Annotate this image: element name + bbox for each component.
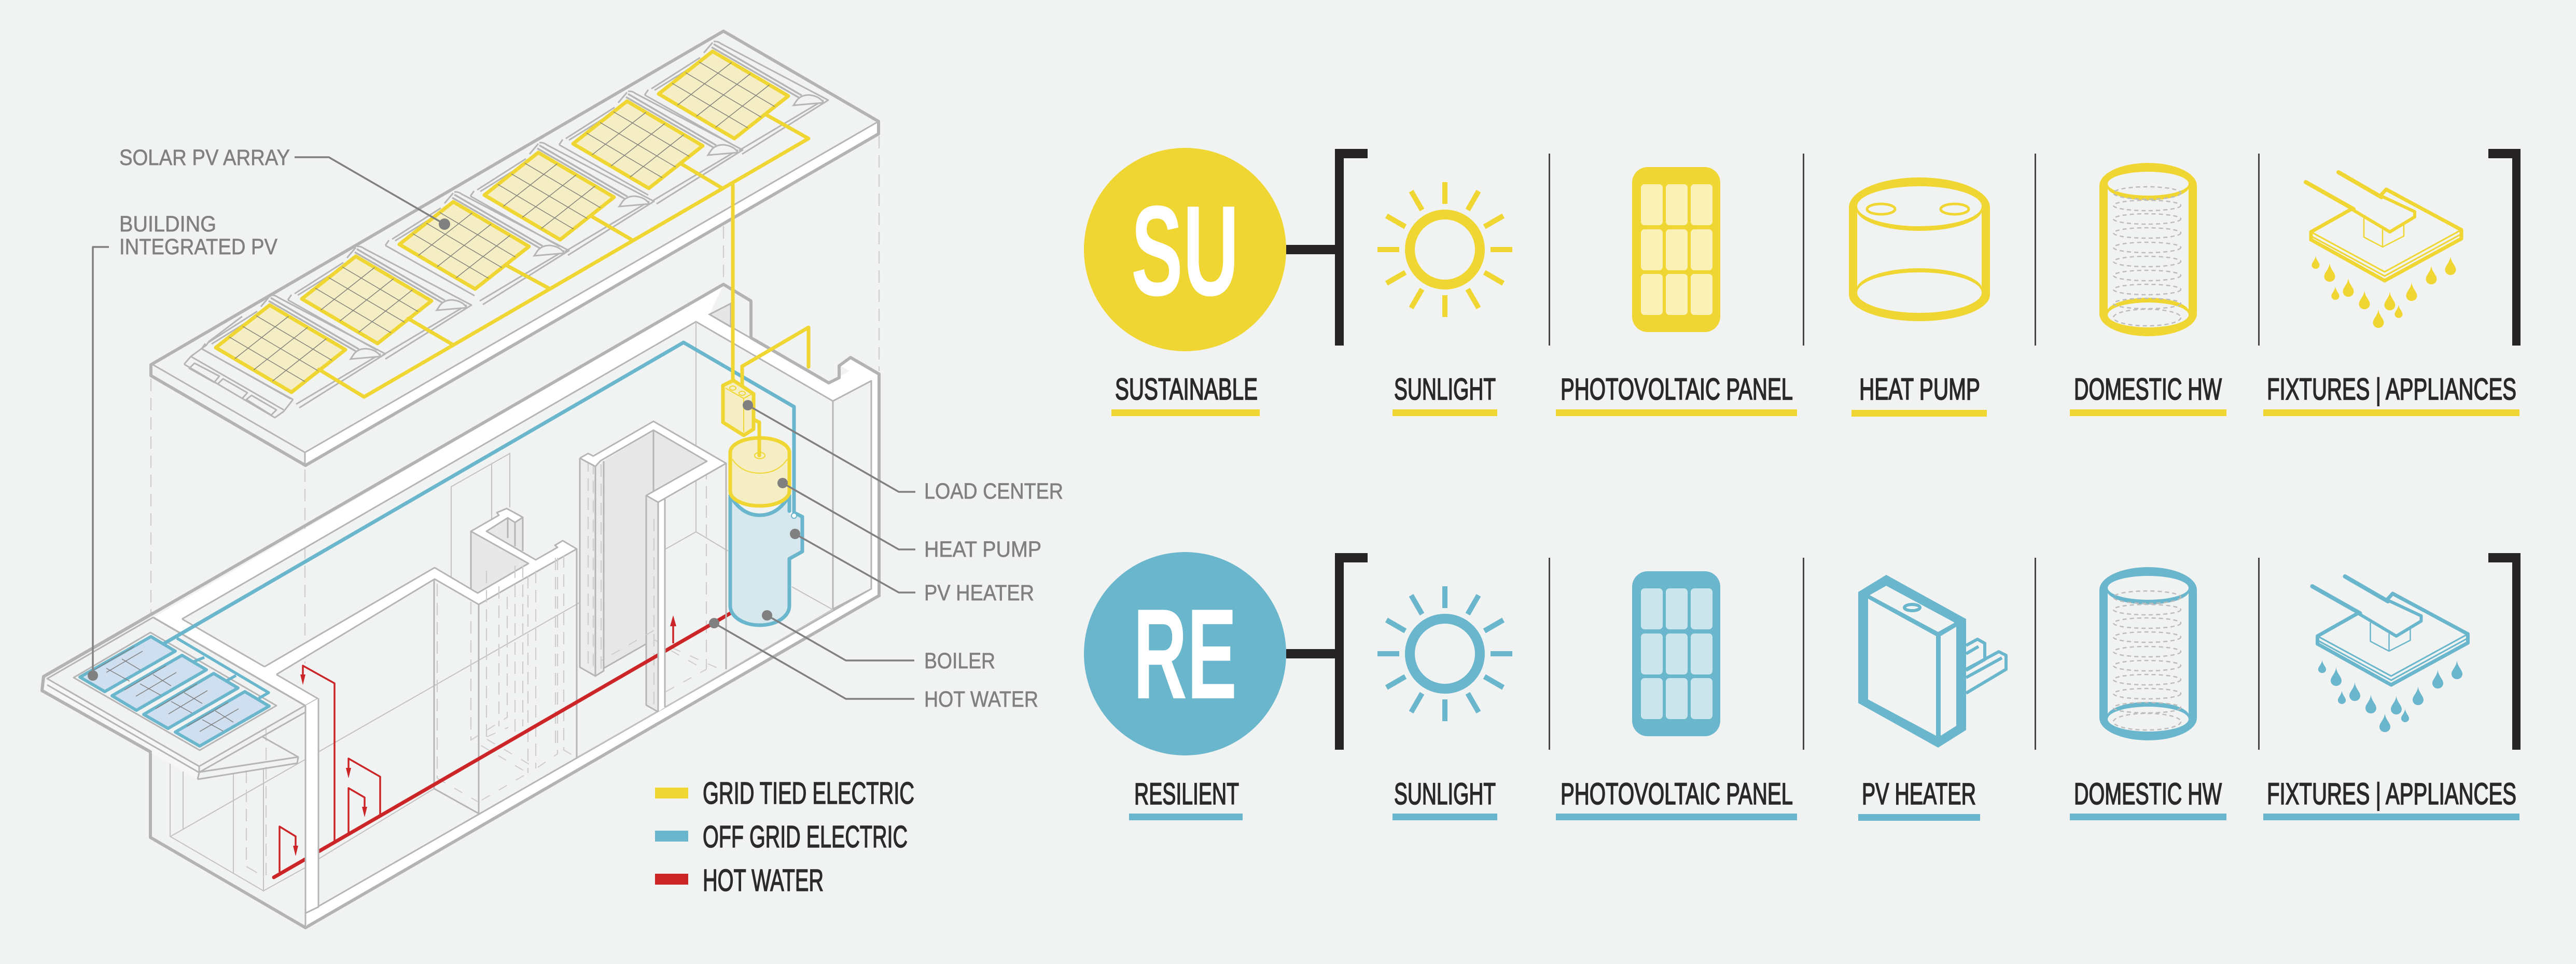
label: solar PV array: SOLAR PV ARRAY [119,145,290,170]
label: resilient: RESILIENT [1134,777,1239,811]
icon: photovoltaic panel [1632,167,1720,332]
dividers [1549,558,2260,750]
label: sunlight [1393,373,1497,416]
label: resilient [1129,777,1243,820]
solar PV array [184,42,828,418]
label: photovoltaic panel [1556,777,1797,820]
label: PV heater: PV HEATER [924,581,1034,605]
front corner column [305,698,318,928]
label: heat pump [1851,373,1987,417]
grid tied wiring on roof [319,115,809,397]
legend: OFF GRID ELECTRIC [703,820,908,854]
panel: sustainable row [1084,148,2521,417]
label: PV heater [1858,777,1980,821]
icon: sunlight [1377,182,1512,317]
panel: resilient row [1084,552,2521,821]
roof slab [151,31,879,466]
label: PV heater: PV HEATER [1862,777,1976,811]
legend: HOT WATER [703,863,824,898]
building integrated PV overhang [42,613,305,779]
label: building integrated PV: INTEGRATED PV [119,235,277,259]
bracket [1286,553,2521,750]
blue photovoltaic modules [80,637,269,746]
label: boiler: BOILER [924,649,995,673]
icon: photovoltaic panel [1632,571,1720,736]
icon: PV heater [1858,575,2006,748]
hot water main [274,604,744,877]
hot water branch lines with arrows [280,615,676,872]
label: solar PV array [119,145,450,230]
legend [655,776,914,898]
icon: fixtures and appliances [2312,576,2468,732]
icon: sunlight [1377,586,1512,721]
label: boiler [762,610,995,673]
label: fixtures and appliances [2263,777,2519,820]
bracket [1286,149,2521,346]
label: PV heater [790,529,1034,605]
label: heat pump: HEAT PUMP [924,537,1041,562]
sustainable badge: SU [1131,178,1239,323]
label: heat pump [777,478,1041,562]
label: domestic hw [2070,373,2226,416]
icon: domestic hot water [2099,567,2197,740]
resilient badge [1084,552,1286,755]
label: photovoltaic panel [1556,373,1797,416]
central gray partition [580,430,720,712]
off grid electric wiring [163,342,794,698]
label: building integrated PV: BUILDING [119,212,216,237]
label: domestic hw: DOMESTIC HW [2074,373,2222,406]
sustainable badge [1084,148,1286,351]
label: sustainable: SUSTAINABLE [1115,373,1258,406]
label: heat pump: HEAT PUMP [1859,373,1980,406]
resilient badge: RE [1133,582,1237,726]
label: domestic hw: DOMESTIC HW [2074,777,2222,811]
label: hot water [709,618,1038,712]
label: domestic hw [2070,777,2226,820]
icon: heat pump [1849,177,1990,321]
heat pump [730,416,789,506]
label: fixtures and appliances [2263,373,2519,416]
partition walls [264,508,577,814]
building lower structure [42,284,879,928]
load center [723,380,754,435]
central partition top and column [580,421,726,712]
label: sustainable [1111,373,1260,416]
outer walls and floor [42,284,879,928]
label: building integrated PV [88,212,277,681]
label: sunlight: SUNLIGHT [1394,777,1496,811]
label: photovoltaic panel: PHOTOVOLTAIC PANEL [1561,373,1793,406]
entrance volume under overhang [170,728,305,891]
label: load center: LOAD CENTER [924,479,1063,504]
grid tied riser wiring [733,185,809,391]
label: sunlight: SUNLIGHT [1394,373,1496,406]
dividers [1549,154,2260,346]
icon: domestic hot water [2099,163,2197,336]
PV heater [789,513,802,559]
label: load center [743,400,1063,504]
label: photovoltaic panel: PHOTOVOLTAIC PANEL [1561,777,1793,811]
boiler tank [730,495,789,625]
label: hot water: HOT WATER [924,687,1038,712]
icon: fixtures and appliances [2306,172,2461,328]
legend: GRID TIED ELECTRIC [703,776,914,810]
projection dashed guide lines [151,136,879,664]
label: sunlight [1393,777,1497,820]
